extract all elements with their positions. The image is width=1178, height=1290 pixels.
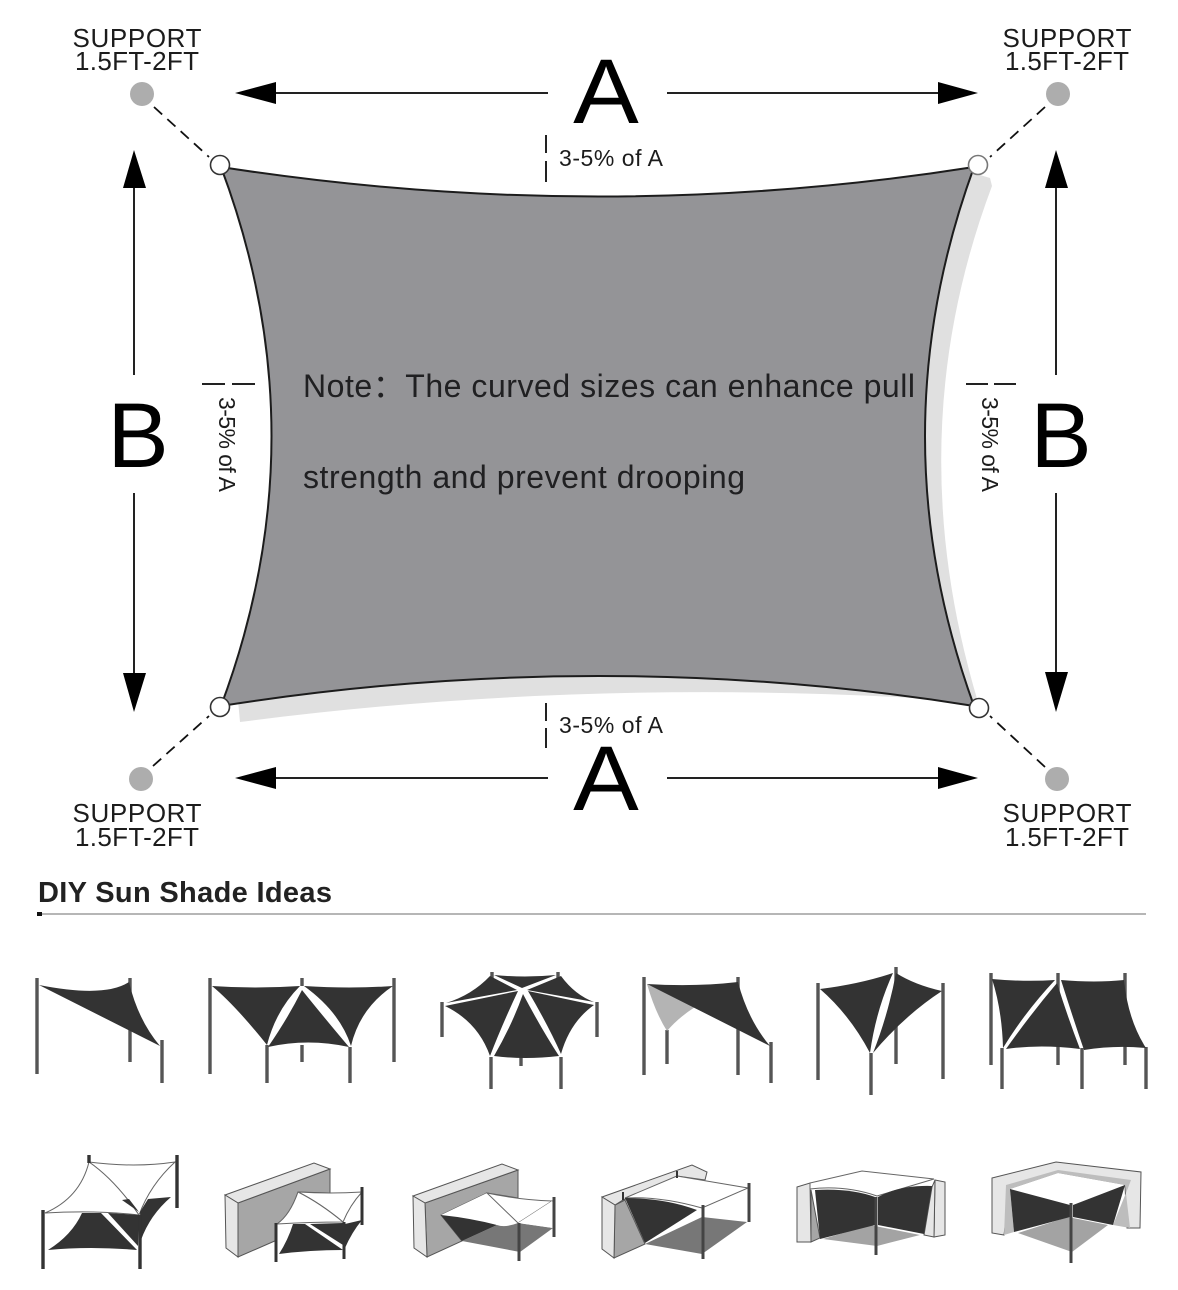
annotation: right: 3-5% of A xyxy=(977,397,1003,493)
annotation: top xyxy=(546,135,664,182)
support bottom left: 1.5FT-2FT xyxy=(75,822,199,852)
idea 10: wall corner sail xyxy=(602,1165,749,1259)
idea 4: triangle with grey sail xyxy=(644,977,771,1083)
annotation: top: 3-5% of A xyxy=(559,145,664,171)
idea 6: three wide sails xyxy=(991,973,1146,1089)
support bottom left xyxy=(72,698,230,852)
idea 5: two sails on four poles xyxy=(818,967,943,1095)
annotation: right xyxy=(966,384,1016,493)
support bottom right: 1.5FT-2FT xyxy=(1005,822,1129,852)
support top left: SUPPORT xyxy=(72,23,202,53)
idea 12: corner wall sail xyxy=(992,1162,1141,1263)
support bottom right: SUPPORT xyxy=(1002,798,1132,828)
idea 2: three triangles xyxy=(210,978,394,1083)
section heading xyxy=(37,877,1146,916)
idea 1: single triangle xyxy=(37,978,162,1083)
idea 3: hexagon canopy xyxy=(442,972,597,1089)
arrow: right B: B xyxy=(1030,385,1092,487)
arrow: top A xyxy=(235,41,978,143)
arrow: top A: A xyxy=(573,41,639,143)
support top left: 1.5FT-2FT xyxy=(75,46,199,76)
annotation: bottom: 3-5% of A xyxy=(559,712,664,738)
support bottom right xyxy=(970,698,1132,852)
note text: Note：The curved sizes can enhance pull xyxy=(303,368,915,404)
annotation: left: 3-5% of A xyxy=(214,397,240,493)
note text: strength and prevent drooping xyxy=(303,459,745,495)
idea 11: two wall sail xyxy=(797,1171,945,1255)
section heading: DIY Sun Shade Ideas xyxy=(38,877,332,909)
idea 7: layered white and dark sails xyxy=(43,1155,177,1269)
arrow: left B: B xyxy=(107,385,169,487)
arrow: left B xyxy=(107,150,169,712)
idea 9: wall and post sail xyxy=(413,1164,554,1261)
curve depth annotations xyxy=(202,135,1016,748)
arrow: bottom A xyxy=(235,728,978,830)
support top left xyxy=(72,23,230,174)
annotation: bottom xyxy=(546,703,664,748)
sail shadow xyxy=(238,172,992,722)
note text xyxy=(303,368,915,495)
support top right xyxy=(968,23,1132,174)
sail shape xyxy=(221,167,974,706)
idea 8: wall mounted sail xyxy=(225,1163,362,1262)
annotation: left xyxy=(202,384,255,493)
support bottom left: SUPPORT xyxy=(72,798,202,828)
dimension arrows xyxy=(107,41,1092,830)
support top right: SUPPORT xyxy=(1002,23,1132,53)
arrow: right B xyxy=(1030,150,1092,712)
arrow: bottom A: A xyxy=(573,728,639,830)
support top right: 1.5FT-2FT xyxy=(1005,46,1129,76)
corner supports xyxy=(72,23,1132,852)
shade sail diagram xyxy=(221,167,992,722)
